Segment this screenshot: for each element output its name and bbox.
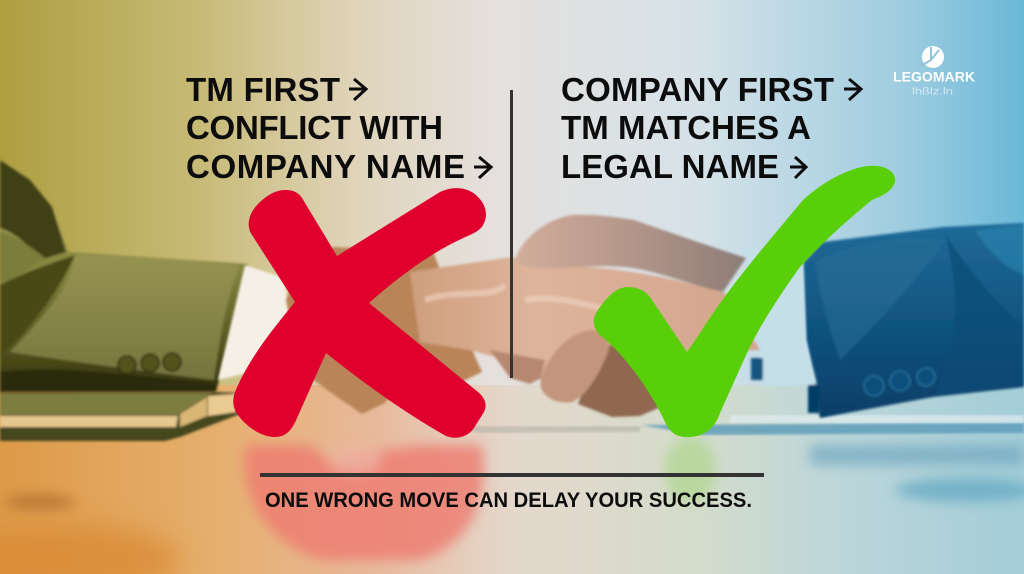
logo icon bbox=[921, 46, 944, 68]
red cross mark bbox=[233, 188, 486, 438]
center divider bbox=[510, 90, 513, 378]
right pale blue cuff bbox=[743, 247, 820, 413]
sleeve folds bbox=[815, 238, 945, 360]
hand backs joined bbox=[410, 257, 760, 372]
table reflections bbox=[0, 415, 1024, 574]
footer tagline: ONE WRONG MOVE CAN DELAY YOUR SUCCESS. bbox=[265, 489, 752, 512]
left thumb and fingers bbox=[286, 247, 482, 414]
under-palm fingers bbox=[490, 350, 545, 384]
table surface bbox=[0, 385, 1024, 574]
left olive sleeve bbox=[0, 160, 248, 392]
logo wordmark: LEGOMARK bbox=[893, 70, 975, 84]
background wall bbox=[0, 0, 1024, 400]
right hand upper fingers bbox=[516, 215, 746, 292]
shoulder shadow bbox=[0, 160, 66, 260]
arrow: TM first bbox=[349, 79, 366, 100]
footer rule bbox=[260, 473, 764, 477]
sleeve folds bbox=[0, 232, 45, 285]
left white cuff bbox=[218, 265, 292, 380]
right hand thumb bbox=[540, 330, 609, 403]
cuff buttons bbox=[118, 353, 181, 374]
handshake hands bbox=[286, 215, 760, 417]
left heading: COMPANY NAME bbox=[186, 148, 465, 185]
left heading bbox=[186, 71, 465, 185]
green check mark bbox=[594, 166, 895, 437]
right heading: TM MATCHES A bbox=[561, 109, 811, 146]
right navy sleeve bbox=[803, 223, 1024, 418]
arrow: company first bbox=[844, 79, 861, 100]
right heading: LEGAL NAME bbox=[561, 148, 779, 185]
arrow: legal name bbox=[790, 157, 806, 178]
arrow: company name bbox=[474, 157, 491, 178]
cuff buttons bbox=[864, 368, 935, 396]
logo tagline: lhßlz.ln bbox=[912, 86, 953, 98]
left heading: TM FIRST bbox=[186, 71, 340, 108]
notebook on table bbox=[0, 392, 240, 441]
logo bbox=[893, 46, 975, 98]
right heading: COMPANY FIRST bbox=[561, 71, 834, 108]
vein highlights bbox=[425, 285, 650, 313]
left heading: CONFLICT WITH bbox=[186, 109, 443, 146]
right hand lower fingers bbox=[578, 345, 665, 417]
right heading bbox=[561, 71, 834, 185]
